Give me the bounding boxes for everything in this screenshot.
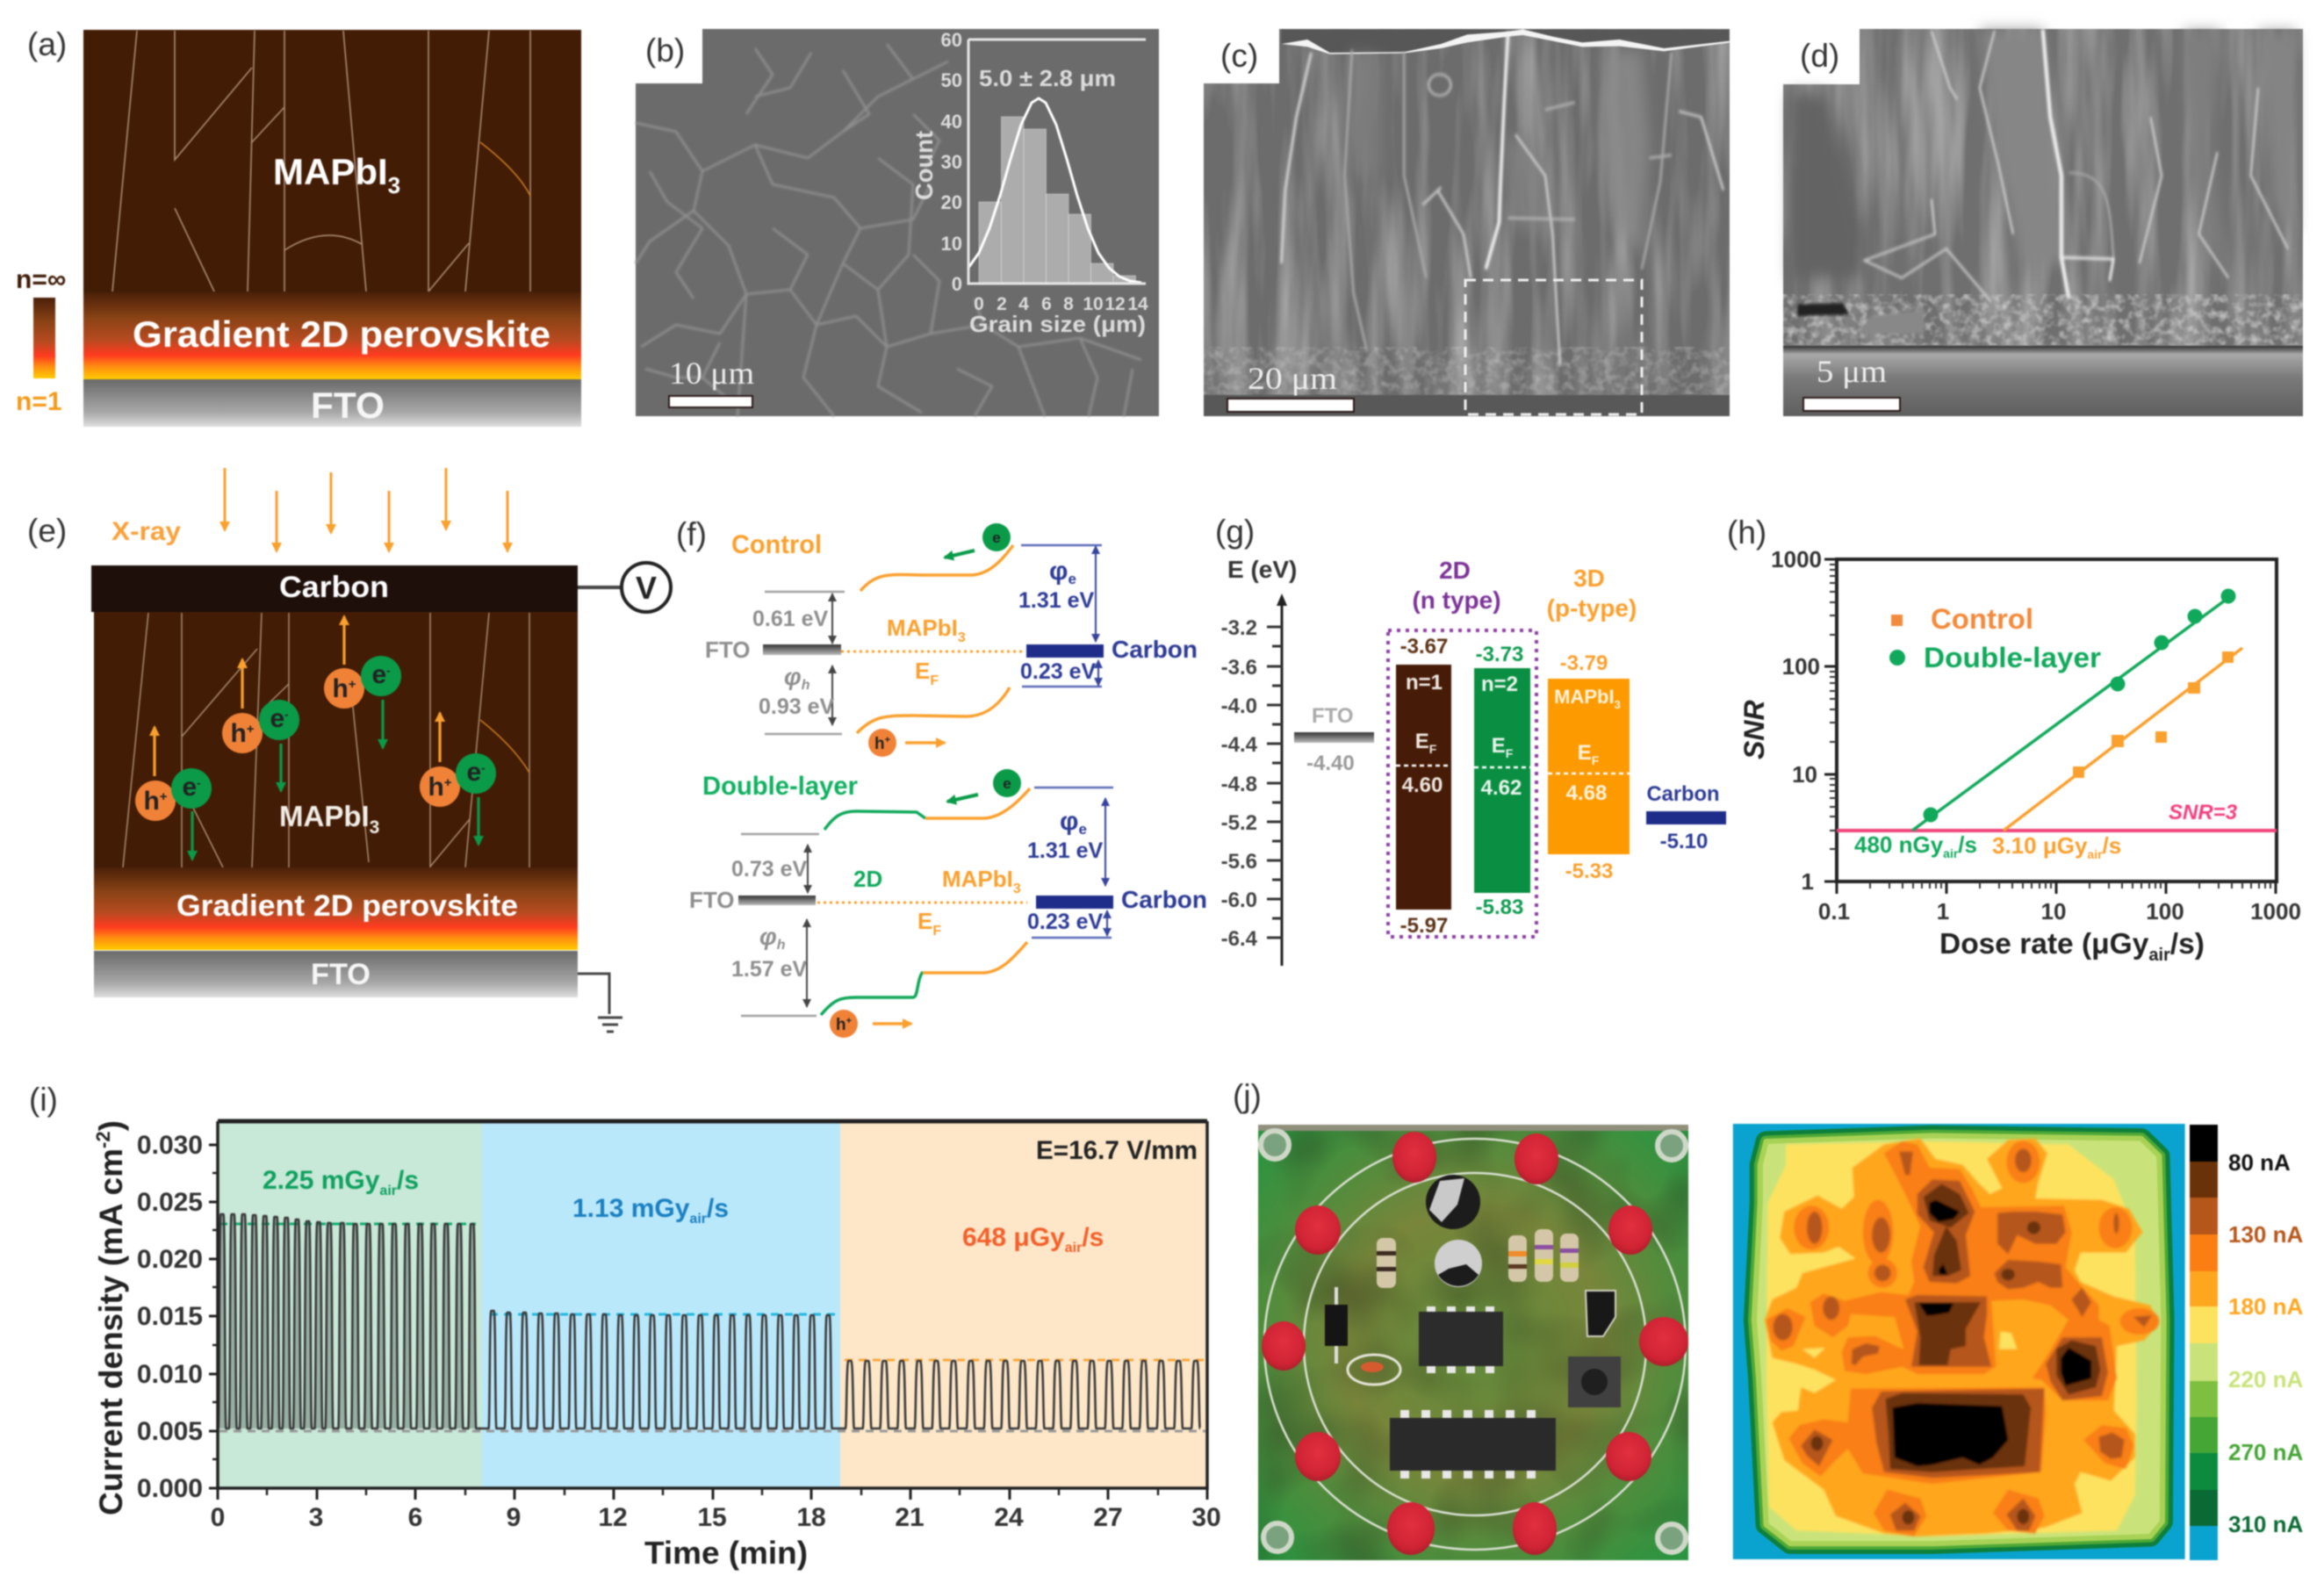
energy axis: -4.0 — [1221, 694, 1257, 718]
x tick labels: 21 — [895, 1503, 925, 1532]
x tick labels: 30 — [1191, 1503, 1221, 1532]
colour scale labels: 130 nA — [2228, 1221, 2303, 1248]
x tick labels: 27 — [1093, 1503, 1123, 1532]
gradient 2D layer: Gradient 2D perovskite — [176, 889, 518, 923]
n=1 bar: n=1 — [1406, 671, 1443, 694]
inset labels: 10 — [941, 233, 962, 255]
dose rate labels: 2.25 mGy — [263, 1166, 379, 1195]
black hot spots — [1893, 1200, 2091, 1466]
y tick labels: 0.020 — [137, 1245, 203, 1274]
double-layer band diagram: φ — [1060, 807, 1078, 836]
detection limit labels: 480 nGy — [1854, 831, 1943, 858]
energy axis: -6.4 — [1221, 927, 1258, 951]
green border contours — [1754, 1135, 2164, 1543]
2D n-type group: 2D — [1439, 557, 1471, 584]
double-layer band diagram: FTO — [689, 887, 735, 913]
dose rate labels: E=16.7 V/mm — [1036, 1136, 1198, 1165]
3D p-type bar: E — [1578, 741, 1592, 765]
inset labels: 4 — [1018, 294, 1029, 314]
double-layer band diagram: 0.73 eV — [731, 857, 808, 881]
electron-hole pairs: - — [197, 776, 201, 789]
legend: Double-layer — [1924, 642, 2101, 673]
label (a): (a) — [27, 26, 67, 62]
label (d): (d) — [1800, 38, 1839, 74]
carbon level — [1646, 782, 1726, 853]
dose rate labels: air — [379, 1184, 397, 1198]
transistor — [1586, 1291, 1615, 1336]
yellow pockets — [1802, 1332, 2018, 1358]
inset labels: 50 — [941, 69, 962, 91]
control band diagram: + — [885, 735, 890, 745]
film features — [1282, 29, 1730, 366]
MAPbI3 label: 3 — [388, 172, 400, 198]
rough bottom grains — [1783, 294, 2303, 345]
MAPbI3 label: 3 — [370, 817, 379, 838]
label (h): (h) — [1727, 514, 1766, 550]
label (j): (j) — [1233, 1078, 1262, 1114]
double-layer band diagram: E — [917, 908, 932, 934]
gradient 2D label: Gradient 2D perovskite — [133, 313, 550, 355]
scale bar 5 um: 5 μm — [1817, 354, 1887, 389]
SEM image background — [1783, 29, 2303, 416]
detection limit labels: 3.10 μGy — [1992, 832, 2087, 859]
n scale colour bar: n=∞ — [16, 265, 66, 294]
3D p-type bar: -5.33 — [1565, 860, 1613, 883]
substrate band — [1783, 346, 2303, 416]
control band diagram: φ — [784, 663, 802, 690]
electron-hole pairs: + — [160, 789, 168, 804]
inset labels: 6 — [1041, 294, 1052, 314]
energy axis: -5.2 — [1221, 811, 1257, 835]
colour scale bar — [2190, 1125, 2218, 1560]
energy axis: -6.0 — [1221, 889, 1257, 912]
axis labels: 1000 — [2250, 898, 2301, 925]
yellow region — [1766, 1141, 2137, 1536]
electron-hole pairs: + — [444, 775, 452, 790]
inset labels: 0 — [952, 273, 962, 295]
perovskite layer — [94, 612, 578, 867]
axis labels: SNR — [1738, 700, 1770, 759]
X-ray label: X-ray — [112, 517, 181, 546]
dose-rate background bands — [218, 1121, 1207, 1488]
energy axis: -5.6 — [1221, 850, 1257, 874]
3D p-type bar: 4.68 — [1566, 781, 1607, 805]
double-layer band diagram: F — [932, 924, 941, 939]
3D p-type bar: (p-type) — [1547, 594, 1637, 622]
label (b) on white notch: (b) — [645, 32, 685, 68]
y tick labels: 0.005 — [137, 1417, 203, 1446]
double-layer band diagram: Carbon — [1121, 886, 1207, 913]
dose rate labels: 648 μGy — [962, 1223, 1065, 1252]
reference dashed levels — [219, 1224, 1205, 1431]
FTO layer: FTO — [311, 958, 371, 991]
inset labels: 5.0 ± 2.8 μm — [979, 65, 1116, 91]
scale bar 5 um — [1803, 354, 1900, 411]
SEM image background — [1204, 29, 1730, 416]
detection limit labels: /s — [2103, 832, 2121, 859]
scale bar 20 um: 20 μm — [1248, 361, 1337, 396]
n=1 bar: -3.67 — [1400, 635, 1448, 658]
energy axis: -4.4 — [1221, 733, 1258, 757]
dashed zoom box — [1465, 280, 1642, 414]
n=2 bar: -3.73 — [1476, 643, 1523, 666]
y tick labels: 0.010 — [137, 1360, 203, 1389]
MAPbI3 label: MAPbI — [273, 151, 388, 192]
control band diagram: 1.31 eV — [1018, 588, 1095, 613]
white rings — [1264, 1139, 1686, 1550]
control band diagram: Control — [731, 530, 822, 559]
dose rate labels: air — [689, 1212, 707, 1227]
axis labels: 1 — [1802, 868, 1814, 895]
panel (d): SEM cross-section magnified — [1783, 29, 2303, 416]
control band diagram: 0.93 eV — [759, 694, 835, 719]
y axis title: Current density (mA cm — [93, 1148, 129, 1515]
panel (j): circuit board photo and current map — [1233, 1078, 2303, 1560]
x tick labels: 6 — [408, 1503, 422, 1532]
brown contours — [1774, 1148, 2152, 1530]
FTO label: FTO — [311, 385, 385, 426]
axis labels: 100 — [2146, 898, 2184, 925]
voltmeter: V — [636, 570, 657, 606]
gradient 2D layer — [83, 292, 581, 379]
control band diagram: Carbon — [1112, 636, 1198, 663]
axis labels: air — [2148, 946, 2170, 965]
axis labels: 10 — [1792, 761, 1817, 788]
electron-hole pairs: h — [428, 773, 444, 802]
y tick labels: 0.015 — [137, 1302, 203, 1331]
double-layer band diagram: 0.23 eV — [1027, 910, 1104, 934]
electron-hole pairs: e — [182, 773, 197, 802]
SEM grain boundaries — [636, 44, 1141, 416]
axis labels: 1 — [1937, 898, 1949, 925]
3D p-type bar — [1547, 565, 1637, 883]
control band diagram: 0.61 eV — [752, 607, 829, 631]
double-layer band diagram — [689, 769, 1207, 1038]
panel (g): energy level diagram — [1215, 514, 1726, 966]
fitted curve — [968, 98, 1141, 283]
label (g): (g) — [1215, 514, 1255, 550]
electron-hole pairs: h — [143, 787, 160, 816]
double-layer series — [1912, 588, 2235, 831]
x axis title: Time (min) — [644, 1535, 808, 1571]
n=2 bar: n=2 — [1481, 673, 1518, 696]
control band diagram: F — [930, 673, 939, 688]
electron-hole pairs: h — [230, 719, 247, 748]
n=1 bar: -5.97 — [1400, 914, 1448, 938]
scale bar 10 um: 10 μm — [669, 356, 754, 391]
inset labels: 20 — [941, 191, 962, 213]
FTO layer — [94, 951, 578, 997]
y tick labels: 0.030 — [137, 1131, 203, 1160]
x tick labels: 24 — [994, 1503, 1024, 1532]
n scale colour bar — [16, 265, 66, 416]
double-layer band diagram: 2D — [853, 866, 882, 892]
vertical grain texture — [1783, 29, 2303, 347]
FTO layer — [83, 379, 581, 427]
x tick labels: 15 — [697, 1503, 727, 1532]
double-layer band diagram: e — [1003, 775, 1011, 792]
x tick labels: 0 — [211, 1503, 225, 1532]
electron-hole pairs: h — [332, 674, 349, 703]
axis labels: Dose rate (μGy — [1939, 928, 2148, 961]
panel (c): SEM cross-section — [1204, 29, 1730, 416]
inset labels — [910, 29, 1148, 337]
FTO level — [1294, 704, 1374, 775]
axis labels: 1000 — [1771, 546, 1822, 572]
x tick labels: 18 — [796, 1503, 826, 1532]
vertical grain texture — [1204, 29, 1730, 395]
label (i): (i) — [29, 1082, 58, 1118]
dose rate labels — [263, 1136, 1198, 1256]
double-layer band diagram: e — [1078, 821, 1087, 838]
panel (h): SNR vs dose rate chart — [1727, 514, 2301, 965]
double-layer band diagram: 1.31 eV — [1027, 838, 1104, 863]
energy axis: -4.8 — [1221, 773, 1257, 796]
n=2 bar: 4.62 — [1481, 776, 1522, 800]
electron-hole pairs: - — [481, 761, 486, 774]
inset labels: 12 — [1104, 294, 1126, 314]
axis labels: 10 — [2041, 898, 2066, 925]
double-layer band diagram: φ — [759, 923, 777, 950]
grain boundaries — [123, 613, 529, 867]
control band diagram: φ — [1049, 557, 1068, 586]
electron-hole pairs: - — [284, 708, 289, 721]
inset labels: 60 — [941, 29, 962, 51]
double-layer band diagram: 1.57 eV — [731, 957, 808, 982]
panel (e): device under X-ray — [27, 468, 671, 1032]
control band diagram: h — [874, 735, 885, 753]
n=1 bar: F — [1429, 742, 1437, 756]
panel (i): current density time trace — [29, 1082, 1221, 1571]
detection limit labels: air — [2087, 847, 2103, 861]
carbon electrode: Carbon — [279, 571, 389, 604]
inset labels: 14 — [1127, 294, 1148, 314]
energy axis: -3.6 — [1221, 656, 1257, 680]
control band diagram: h — [802, 678, 810, 693]
n=1 bar — [1396, 635, 1451, 938]
control band diagram: e — [992, 529, 1001, 546]
scale bar 20 um — [1227, 361, 1354, 412]
axes frame — [209, 1121, 1207, 1500]
y tick labels: 0.025 — [137, 1188, 203, 1217]
energy axis — [1221, 556, 1297, 966]
carbon level: -5.10 — [1660, 830, 1708, 853]
3D p-type bar: MAPbI — [1554, 686, 1615, 708]
energy axis: -3.2 — [1221, 616, 1257, 640]
colour scale labels: 310 nA — [2228, 1511, 2303, 1537]
x tick labels: 9 — [507, 1503, 521, 1532]
n=1 bar: E — [1415, 730, 1429, 753]
3D p-type bar: F — [1592, 753, 1600, 767]
voltmeter — [578, 563, 671, 612]
inset labels: 10 — [1083, 294, 1104, 314]
FTO level: -4.40 — [1306, 752, 1355, 775]
PCB photograph — [1258, 1125, 1688, 1560]
x tick labels: 12 — [598, 1503, 628, 1532]
double-layer band diagram: + — [846, 1016, 852, 1026]
push button — [1568, 1356, 1621, 1407]
x tick labels — [211, 1503, 1221, 1532]
capacitors — [1426, 1175, 1482, 1287]
dose rate labels: /s — [707, 1194, 729, 1223]
yellow and hot contour layers — [1765, 1139, 2159, 1536]
double-layer band diagram: 3 — [1013, 881, 1021, 896]
inset labels: Grain size (μm) — [969, 311, 1146, 337]
inset labels: 40 — [941, 111, 962, 133]
inset labels: Count — [910, 131, 938, 200]
X-ray arrows — [225, 468, 507, 551]
colour scale labels: 180 nA — [2228, 1293, 2303, 1320]
electron-hole pairs: e — [270, 704, 284, 733]
axis labels: 0.1 — [1818, 898, 1850, 925]
diode outline — [1348, 1355, 1400, 1385]
double-layer band diagram: h — [777, 938, 786, 953]
control band diagram: 3 — [958, 630, 966, 645]
dose rate labels: air — [1065, 1241, 1082, 1256]
dose rate labels: 1.13 mGy — [572, 1194, 689, 1223]
2D n-type group: (n type) — [1412, 586, 1501, 614]
panel (f): band diagrams — [676, 516, 1207, 1038]
scale bar 10 um — [669, 356, 754, 407]
rough bottom grains — [1204, 347, 1730, 394]
colour scale labels: 270 nA — [2228, 1439, 2303, 1465]
axis labels: 100 — [1782, 653, 1820, 680]
electron-hole pairs: e — [466, 758, 481, 787]
electron-hole pairs — [135, 656, 496, 821]
inset histogram — [910, 29, 1148, 337]
legend — [1889, 603, 2101, 673]
red LEDs — [1262, 1132, 1688, 1555]
colour scale labels: 220 nA — [2228, 1366, 2303, 1392]
control band diagram: FTO — [705, 637, 751, 663]
y tick labels: 0.000 — [137, 1474, 203, 1503]
light orange region — [1765, 1139, 2159, 1536]
dose rate labels: /s — [397, 1166, 419, 1195]
2D n-type group — [1388, 557, 1536, 938]
y axis title: -2 — [92, 1131, 114, 1148]
inset labels: 2 — [997, 294, 1007, 314]
electron-hole pairs: + — [349, 677, 356, 692]
n=1 bar: 4.60 — [1402, 774, 1443, 797]
detection limit labels — [1854, 831, 2121, 861]
3D p-type bar: 3 — [1615, 698, 1621, 711]
n=2 bar: F — [1506, 746, 1514, 760]
panel (a): device layer schematic — [16, 26, 581, 427]
small IC — [1419, 1306, 1503, 1373]
control band diagram: MAPbI — [887, 615, 958, 641]
inset labels: 0 — [974, 294, 984, 314]
y tick labels — [137, 1131, 203, 1503]
colour scale labels: 80 nA — [2228, 1149, 2291, 1176]
n scale colour bar: n=1 — [16, 387, 62, 416]
header — [1325, 1287, 1348, 1364]
n=2 bar: E — [1492, 734, 1506, 758]
3D p-type bar: -3.79 — [1560, 651, 1608, 675]
carbon electrode — [91, 565, 578, 612]
background — [1733, 1124, 2185, 1559]
dark brown contours — [1811, 1184, 2100, 1524]
large IC — [1390, 1410, 1556, 1479]
3D p-type bar: 3D — [1573, 565, 1605, 592]
SNR=3 threshold line: SNR=3 — [2169, 801, 2238, 824]
electron-hole pairs: e — [371, 660, 386, 689]
MAPbI3 layer — [83, 30, 581, 292]
x tick labels: 3 — [309, 1503, 323, 1532]
energy axis: E (eV) — [1227, 556, 1297, 583]
detection limit labels: air — [1943, 846, 1959, 860]
double-layer band diagram: MAPbI — [942, 866, 1013, 892]
gradient 2D layer — [94, 867, 578, 950]
double-layer band diagram: Double-layer — [702, 772, 858, 801]
current contour map — [1733, 1124, 2185, 1559]
substrate band — [1204, 395, 1730, 416]
mounting holes — [1261, 1131, 1686, 1552]
n=2 bar — [1474, 643, 1530, 919]
chart frame and ticks — [1824, 559, 2277, 894]
n=2 bar: -5.83 — [1476, 896, 1523, 919]
control series — [2004, 648, 2242, 831]
detection limit labels: /s — [1958, 831, 1977, 858]
grain boundaries — [112, 31, 530, 291]
carrier arrows — [155, 616, 478, 860]
control band diagram: 0.23 eV — [1020, 659, 1097, 684]
inset labels: 30 — [941, 151, 962, 173]
label (c): (c) — [1220, 38, 1258, 74]
board — [1258, 1125, 1688, 1560]
MAPbI3 label: MAPbI — [279, 800, 370, 832]
axis labels: /s) — [2170, 928, 2205, 961]
dose rate labels: /s — [1082, 1223, 1104, 1252]
grain features — [1790, 29, 2295, 334]
photocurrent pulses — [218, 1214, 481, 1428]
ground symbol — [578, 974, 622, 1032]
control band diagram — [705, 523, 1198, 757]
inset axes — [968, 40, 1146, 284]
colour scale labels — [2228, 1149, 2303, 1537]
electron-hole pairs: + — [247, 722, 255, 737]
resistors — [1377, 1229, 1579, 1288]
y axis title: ) — [93, 1120, 129, 1131]
electron-hole pairs: - — [386, 664, 391, 677]
FTO level: FTO — [1312, 704, 1354, 728]
carbon level: Carbon — [1647, 782, 1719, 806]
control band diagram: e — [1068, 571, 1076, 587]
SEM image background — [636, 29, 1159, 416]
label (f): (f) — [676, 516, 707, 552]
axis labels — [1738, 546, 2301, 965]
legend: Control — [1931, 603, 2033, 635]
inset labels: 8 — [1063, 294, 1074, 314]
orange region — [1766, 1140, 2159, 1536]
histogram bars — [979, 117, 1136, 284]
control band diagram: E — [915, 658, 930, 684]
label (e): (e) — [27, 513, 67, 549]
double-layer band diagram: h — [836, 1016, 846, 1034]
